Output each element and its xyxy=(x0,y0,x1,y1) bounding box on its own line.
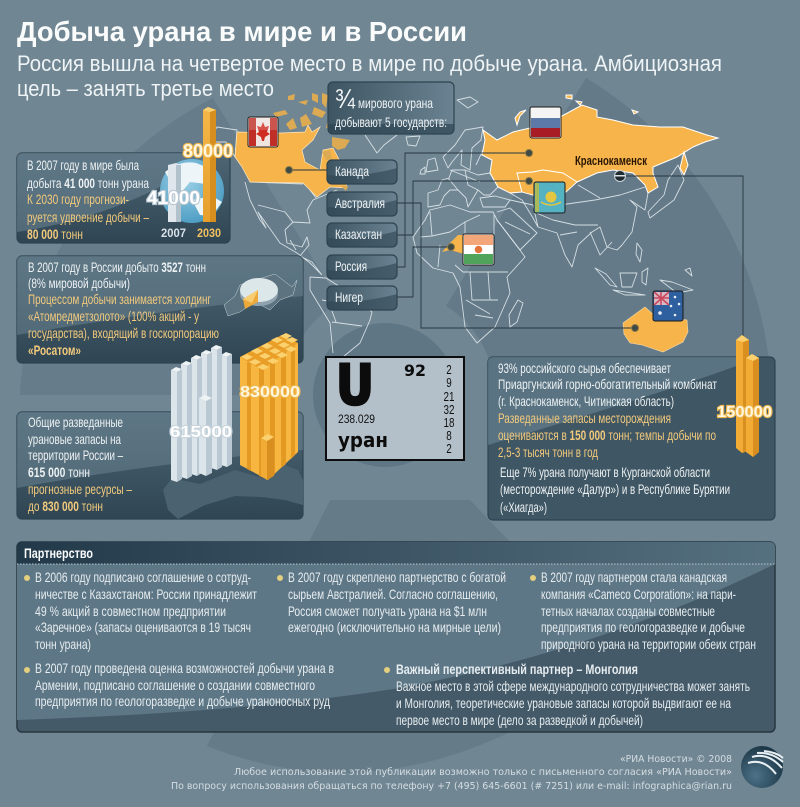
item: Kazakhstan: ничестве с Казахстаном: России принадлежит xyxy=(35,586,257,602)
panel: Russia production xyxy=(17,256,303,363)
item: Armenia: Армении, подписано соглашение о создании совместного xyxy=(35,677,315,693)
footer credits xyxy=(171,754,732,792)
bar: 2007 xyxy=(168,163,181,222)
Kazakhstan, orange xyxy=(517,170,577,197)
panel: reserves: урановые запасы на xyxy=(28,431,121,447)
label: Niger: Нигер xyxy=(335,289,363,305)
panel: Priargunsky: оцениваются в 150 000 тонн; темпы добычи по xyxy=(498,427,716,443)
element card: uranium: 2 xyxy=(446,441,452,456)
element card: uranium: 238.029 xyxy=(338,412,375,426)
Russia, orange xyxy=(482,95,718,193)
panel: Priargunsky: 93% российского сырья обеспечивает xyxy=(498,360,671,376)
label: Niger xyxy=(327,286,397,310)
item: Kazakhstan: «Заречное» (запасы оцениваются в 19 тысяч xyxy=(35,619,251,635)
item: Armenia: предприятия по геологоразведке и добыче ураноносных руд xyxy=(35,693,330,709)
element card: uranium: 2 xyxy=(446,362,452,377)
element card: uranium: 32 xyxy=(444,402,454,417)
value 830000: 830000 xyxy=(240,384,300,401)
panel: Priargunsky xyxy=(488,357,775,520)
element card: uranium: 92 xyxy=(404,361,426,380)
location markers xyxy=(286,150,638,332)
panel: three quarters xyxy=(328,82,454,134)
label: Kazakhstan: Казахстан xyxy=(335,226,382,242)
item: Canada: тетных началах созданы совместные xyxy=(541,603,715,619)
item: Armenia: В 2007 году проведена оценка возможностей добычи урана в xyxy=(35,660,334,676)
element card: uranium: 18 xyxy=(444,415,454,430)
year labels: 2030 xyxy=(197,226,221,240)
title: Добыча урана в мире и в России xyxy=(17,16,467,47)
logo: RIA Novosti globe xyxy=(741,746,783,788)
Russia map xyxy=(163,465,303,519)
panel: reserves: 615 000 тонн xyxy=(28,464,90,480)
value 41000: 41000 xyxy=(147,188,200,208)
footer credits: По вопросу использования обращаться по телефону +7 (495) 645-6601 (# 7251) или e-mail: infographica@rian.ru xyxy=(171,781,732,792)
panel: Priargunsky: («Хиагда») xyxy=(500,499,547,515)
item: Australia xyxy=(277,569,506,635)
bar: 2030 xyxy=(203,107,216,222)
item: Canada: В 2007 году партнером стала канадская xyxy=(541,569,727,585)
panel: world production: В 2007 году в мире была xyxy=(27,157,139,173)
item: Kazakhstan: 49 % акций в совместном предприятии xyxy=(35,603,226,619)
label: Canada: Канада xyxy=(335,163,369,179)
Australia, orange xyxy=(623,307,688,352)
panel: reserves: территории России – xyxy=(28,447,123,463)
element card: uranium: 21 xyxy=(444,389,454,404)
panel: reserves: Общие разведанные xyxy=(28,414,123,430)
flag: Russia xyxy=(530,107,561,138)
partnership header xyxy=(17,542,775,564)
label: Canada xyxy=(327,160,397,184)
globe xyxy=(160,159,224,223)
panel: Russia production: «Атомредметзолото» (100% акций - у xyxy=(28,308,199,324)
panel: Russia production: Процессом добычи занимается холдинг xyxy=(28,291,211,307)
item: Kazakhstan xyxy=(24,569,257,652)
label: Kazakhstan xyxy=(327,223,397,247)
item: Australia: ежегодно (исключительно на мирные цели) xyxy=(288,619,501,635)
panel: Russia production: (8% мировой добычи) xyxy=(28,275,130,291)
Krasnokamensk marker xyxy=(614,170,626,182)
footer credits: «РИА Новости» © 2008 xyxy=(620,754,732,765)
item: Mongolia xyxy=(384,661,750,728)
panel: reserves: прогнозные ресурсы – xyxy=(28,481,132,497)
flag: Canada xyxy=(248,117,278,147)
panel: Russia production: «Росатом» xyxy=(28,342,81,358)
Canada, orange xyxy=(235,93,350,197)
panel: Priargunsky: 2,5-3 тысяч тонн в год xyxy=(498,444,598,460)
leader lines from labels to countries xyxy=(289,153,743,336)
panel: world production: 80 000 тонн xyxy=(27,226,83,242)
flag: Kazakhstan xyxy=(534,182,565,213)
value 80000: 80000 xyxy=(183,141,233,161)
year labels xyxy=(161,226,221,240)
item: Australia: Россия сможет получать урана на $1 млн xyxy=(288,603,487,619)
Niger, orange xyxy=(442,235,465,254)
item: Armenia xyxy=(24,660,334,709)
panel: Priargunsky: Приаргунский горно-обогатительный комбинат xyxy=(498,376,717,392)
item: Canada xyxy=(530,569,756,652)
panel: three quarters: добывают 5 государств: xyxy=(335,114,447,130)
label: Russia: Россия xyxy=(335,258,367,274)
panel: partnership xyxy=(17,542,775,732)
panel: three quarters: мирового урана xyxy=(358,95,433,111)
continent outlines and borders xyxy=(208,97,693,357)
footer credits: Любое использование этой публикации возможно только с письменного согласия «РИА Новости» xyxy=(234,767,732,778)
value 150000: 150000 xyxy=(717,404,772,421)
mini Russia map with pie xyxy=(224,274,297,316)
panel: world production xyxy=(17,107,233,243)
element card: uranium xyxy=(326,353,464,460)
year labels: 2007 xyxy=(161,226,186,240)
flag: Niger xyxy=(463,234,494,265)
element card: uranium: 9 xyxy=(446,375,452,390)
label: Australia: Австралия xyxy=(335,195,385,211)
item: Mongolia: первое место в мире (дело за разведкой и добычей) xyxy=(396,712,643,728)
panel: Russia production: В 2007 году в России добыто 3527 тонн xyxy=(28,259,206,275)
panel: world production: руется удвоение добычи – xyxy=(27,209,149,225)
label: Australia xyxy=(327,192,397,216)
bar: Krasnokamensk deposit xyxy=(717,335,772,457)
panel: Priargunsky: Еще 7% урана получают в Курганской области xyxy=(500,464,710,480)
item: Mongolia: Важный перспективный партнер – Монголия xyxy=(396,661,638,677)
label: Russia xyxy=(327,255,397,279)
panel: Priargunsky: (г. Краснокаменск, Читинская область) xyxy=(498,393,674,409)
chart: proven reserves white bars xyxy=(170,345,232,482)
subtitle: Россия вышла на четвертое место в мире по добыче урана. Амбициозная xyxy=(17,51,722,76)
element card: uranium: 8 xyxy=(446,428,452,443)
panel: Russia production: государства), входящий в госкорпорацию xyxy=(28,325,219,341)
chart: forecast resources orange bars xyxy=(240,333,300,480)
panel: three quarters: ¾ xyxy=(335,84,355,114)
Krasnokamensk label: Краснокаменск xyxy=(575,153,647,168)
panel: Priargunsky: Разведанные запасы месторождения xyxy=(498,410,671,426)
panel: world production: К 2030 году прогнози- xyxy=(27,191,129,207)
panel: reserves: до 830 000 тонн xyxy=(28,498,103,514)
subtitle xyxy=(17,51,722,101)
item: Australia: сырьем Австралией. Согласно соглашению, xyxy=(288,586,498,602)
value 615000: 615000 xyxy=(170,424,232,441)
subtitle: цель – занять третье место xyxy=(17,76,274,101)
flag: Australia xyxy=(653,291,683,321)
panel: reserves xyxy=(17,412,303,519)
element card: uranium: уран xyxy=(338,428,388,452)
partnership header: Партнерство xyxy=(24,545,93,561)
item: Australia: В 2007 году скреплено партнерство с богатой xyxy=(288,569,506,585)
item: Kazakhstan: В 2006 году подписано соглашение о сотруд- xyxy=(35,569,251,585)
panel: world production: добыта 41 000 тонн урана xyxy=(27,175,149,191)
item: Kazakhstan: тонн урана) xyxy=(35,636,91,652)
world map xyxy=(208,93,718,357)
element card: uranium: U xyxy=(336,353,374,417)
